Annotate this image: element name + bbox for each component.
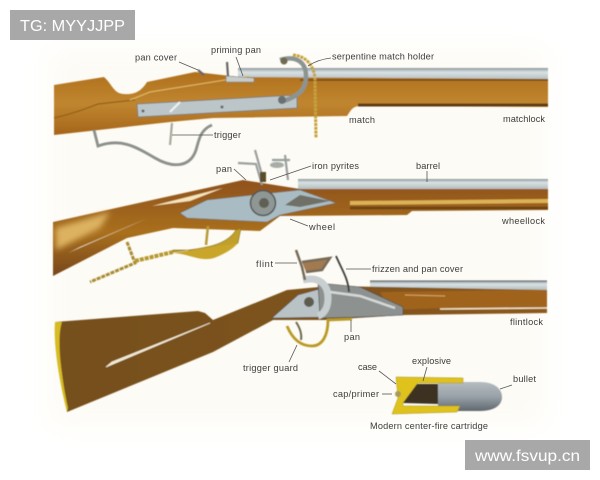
- labels: cartridge: [333, 356, 536, 431]
- labels: flintlock: frizzen and pan cover: [372, 264, 463, 274]
- watermark: top left: [10, 10, 135, 40]
- labels: wheellock: pan: [216, 164, 232, 174]
- stock: [55, 286, 547, 412]
- barrel: [298, 179, 548, 189]
- labels: flintlock: flint: [256, 259, 273, 269]
- cartridge: [392, 377, 502, 414]
- stock highlights: [152, 188, 223, 206]
- labels: cartridge: cap/primer: [333, 389, 379, 399]
- labels: matchlock: [135, 45, 545, 140]
- labels: wheellock: barrel: [416, 161, 440, 171]
- dog head: [238, 150, 290, 185]
- labels: flintlock: trigger guard: [243, 363, 298, 373]
- labels: matchlock: trigger: [214, 130, 241, 140]
- bullet: [438, 382, 502, 411]
- labels: flintlock: flintlock: [510, 317, 543, 327]
- labels: matchlock: match: [349, 115, 375, 125]
- labels: matchlock: pan cover: [135, 52, 177, 62]
- labels: wheellock: wheel: [308, 222, 335, 232]
- labels: flintlock: [243, 259, 543, 373]
- cock: [296, 250, 330, 280]
- lock plate: [137, 95, 297, 117]
- stock highlight: [106, 323, 210, 367]
- brass guard: [90, 242, 135, 282]
- lever and trigger: [94, 125, 212, 165]
- labels: wheellock: [216, 161, 545, 232]
- labels: matchlock: priming pan: [211, 45, 261, 55]
- leader lines: [172, 57, 512, 394]
- wheel: [250, 190, 276, 216]
- wheellock gun: [53, 150, 548, 282]
- labels: cartridge: bullet: [513, 374, 536, 384]
- labels: flintlock: pan: [344, 332, 360, 342]
- barrel: [370, 281, 547, 290]
- labels: cartridge: Modern center-fire cartridge: [370, 421, 488, 431]
- labels: cartridge: explosive: [412, 356, 451, 366]
- labels: matchlock: serpentine match holder: [332, 52, 434, 62]
- watermark: bottom right: [465, 440, 590, 470]
- case: [392, 377, 463, 414]
- match: [293, 55, 316, 138]
- explosive: [403, 384, 438, 404]
- flintlock gun: [55, 250, 547, 412]
- watermark: top left: TG: MYYJJPP: [20, 18, 125, 35]
- labels: wheellock: iron pyrites: [312, 161, 359, 171]
- barrel: [238, 68, 548, 80]
- labels: cartridge: case: [358, 362, 377, 372]
- trigger guard: [287, 319, 352, 346]
- lock plate: [272, 287, 328, 318]
- primer: [395, 391, 401, 397]
- butt plate: [55, 322, 68, 412]
- stock: [54, 72, 548, 135]
- labels: wheellock: wheellock: [501, 216, 545, 226]
- stock: [53, 180, 548, 276]
- lock plate: [180, 190, 336, 222]
- serpentine: [280, 58, 306, 101]
- matchlock gun: [54, 55, 548, 165]
- labels: matchlock: matchlock: [503, 114, 545, 124]
- pan: [226, 76, 254, 82]
- frizzen: [336, 256, 349, 292]
- trigger: [206, 226, 208, 245]
- watermark: bottom right: www.fsvup.cn: [474, 448, 580, 465]
